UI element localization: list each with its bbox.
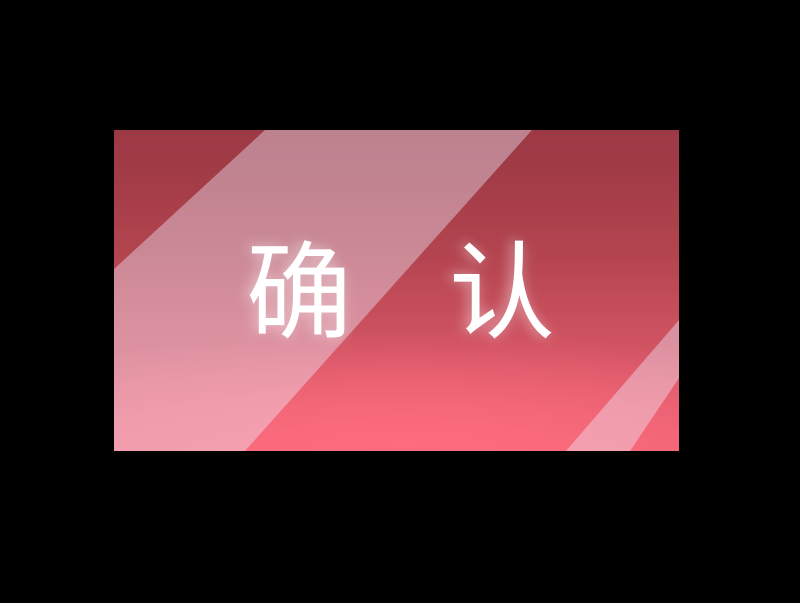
diagonal light bands bbox=[114, 130, 679, 451]
heading: confirm character two: 认 bbox=[449, 235, 555, 353]
panel: confirm button bbox=[114, 130, 679, 451]
heading: confirm character one: 确 bbox=[246, 235, 352, 353]
